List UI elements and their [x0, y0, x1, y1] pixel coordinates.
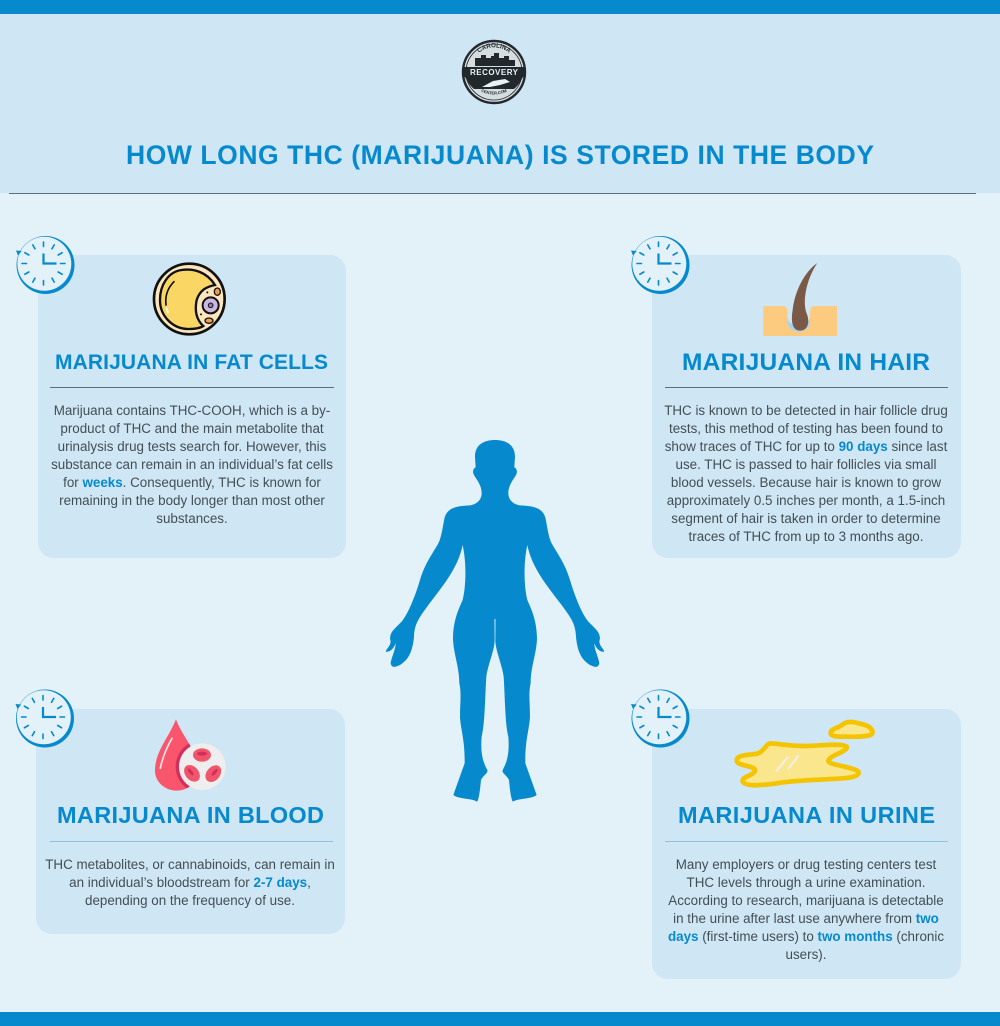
logo: Carolina Recovery Center: CENTER.COM: [482, 89, 507, 94]
text block: Many employers or drug testing centers test: [676, 857, 937, 872]
text block: days (first-time users) to two months (chronic: [668, 929, 944, 944]
text block: [664, 403, 948, 544]
text block: traces of THC from up to 3 months ago.: [689, 529, 923, 544]
text block: substances.: [156, 511, 228, 526]
icon: clock: [631, 690, 690, 748]
text block: approximately 0.5 inches per month, a 1.5-inch: [667, 493, 945, 508]
logo: Carolina Recovery Center: [462, 40, 526, 104]
text block: [668, 857, 944, 962]
text block: THC levels through a urine examination.: [687, 875, 925, 890]
text block: [45, 857, 335, 908]
text block: product of THC and the main metabolite that: [60, 421, 324, 436]
heading: MARIJUANA IN URINE: [678, 802, 935, 828]
text block: in the urine after last use anywhere from two: [673, 911, 939, 926]
icon: fat cell: [154, 264, 225, 334]
heading: MARIJUANA IN BLOOD: [57, 802, 324, 828]
bottom band: [0, 1012, 1000, 1026]
icon: clock: [631, 236, 690, 294]
panel: marijuana in hair: [631, 236, 961, 558]
text block: an individual’s bloodstream for 2-7 days,: [69, 875, 311, 890]
header band: [0, 0, 1000, 194]
text block: depending on the frequency of use.: [85, 893, 295, 908]
text block: substance can remain in an individual’s fat cells: [51, 457, 333, 472]
icon: clock: [16, 690, 74, 748]
title: HOW LONG THC (MARIJUANA) IS STORED IN THE BODY: [126, 140, 874, 170]
panel: marijuana in fat cells: [16, 236, 346, 558]
human body silhouette: [386, 440, 604, 802]
icon: clock: [16, 236, 74, 294]
text block: urinalysis drug tests search for. However, this: [58, 439, 327, 454]
text block: segment of hair is taken in order to determine: [671, 511, 941, 526]
heading: MARIJUANA IN FAT CELLS: [55, 351, 328, 374]
icon: blood drop and cells: [155, 719, 229, 793]
text block: THC is known to be detected in hair follicle drug: [664, 403, 948, 418]
text block: According to research, marijuana is detectable: [668, 893, 944, 908]
icon: urine puddle: [737, 722, 873, 785]
text block: [51, 403, 333, 526]
logo: Carolina Recovery Center: RECOVERY: [470, 68, 519, 77]
logo: Carolina Recovery Center: CAROLINA: [477, 43, 510, 53]
text block: remaining in the body longer than most other: [59, 493, 325, 508]
text block: Marijuana contains THC-COOH, which is a by-: [54, 403, 330, 418]
heading: MARIJUANA IN HAIR: [682, 349, 930, 376]
text block: users).: [786, 947, 826, 962]
panel: marijuana in blood: [16, 690, 345, 934]
text block: blood vessels. Because hair is known to grow: [671, 475, 941, 490]
text block: use. THC is passed to hair follicles via small: [676, 457, 937, 472]
text block: show traces of THC for up to 90 days since last: [665, 439, 948, 454]
text block: THC metabolites, or cannabinoids, can remain in: [45, 857, 335, 872]
text block: for weeks. Consequently, THC is known for: [63, 475, 321, 490]
panel: marijuana in urine: [631, 690, 961, 979]
icon: hair follicle: [763, 263, 837, 336]
text block: tests, this method of testing has been found to: [669, 421, 943, 436]
